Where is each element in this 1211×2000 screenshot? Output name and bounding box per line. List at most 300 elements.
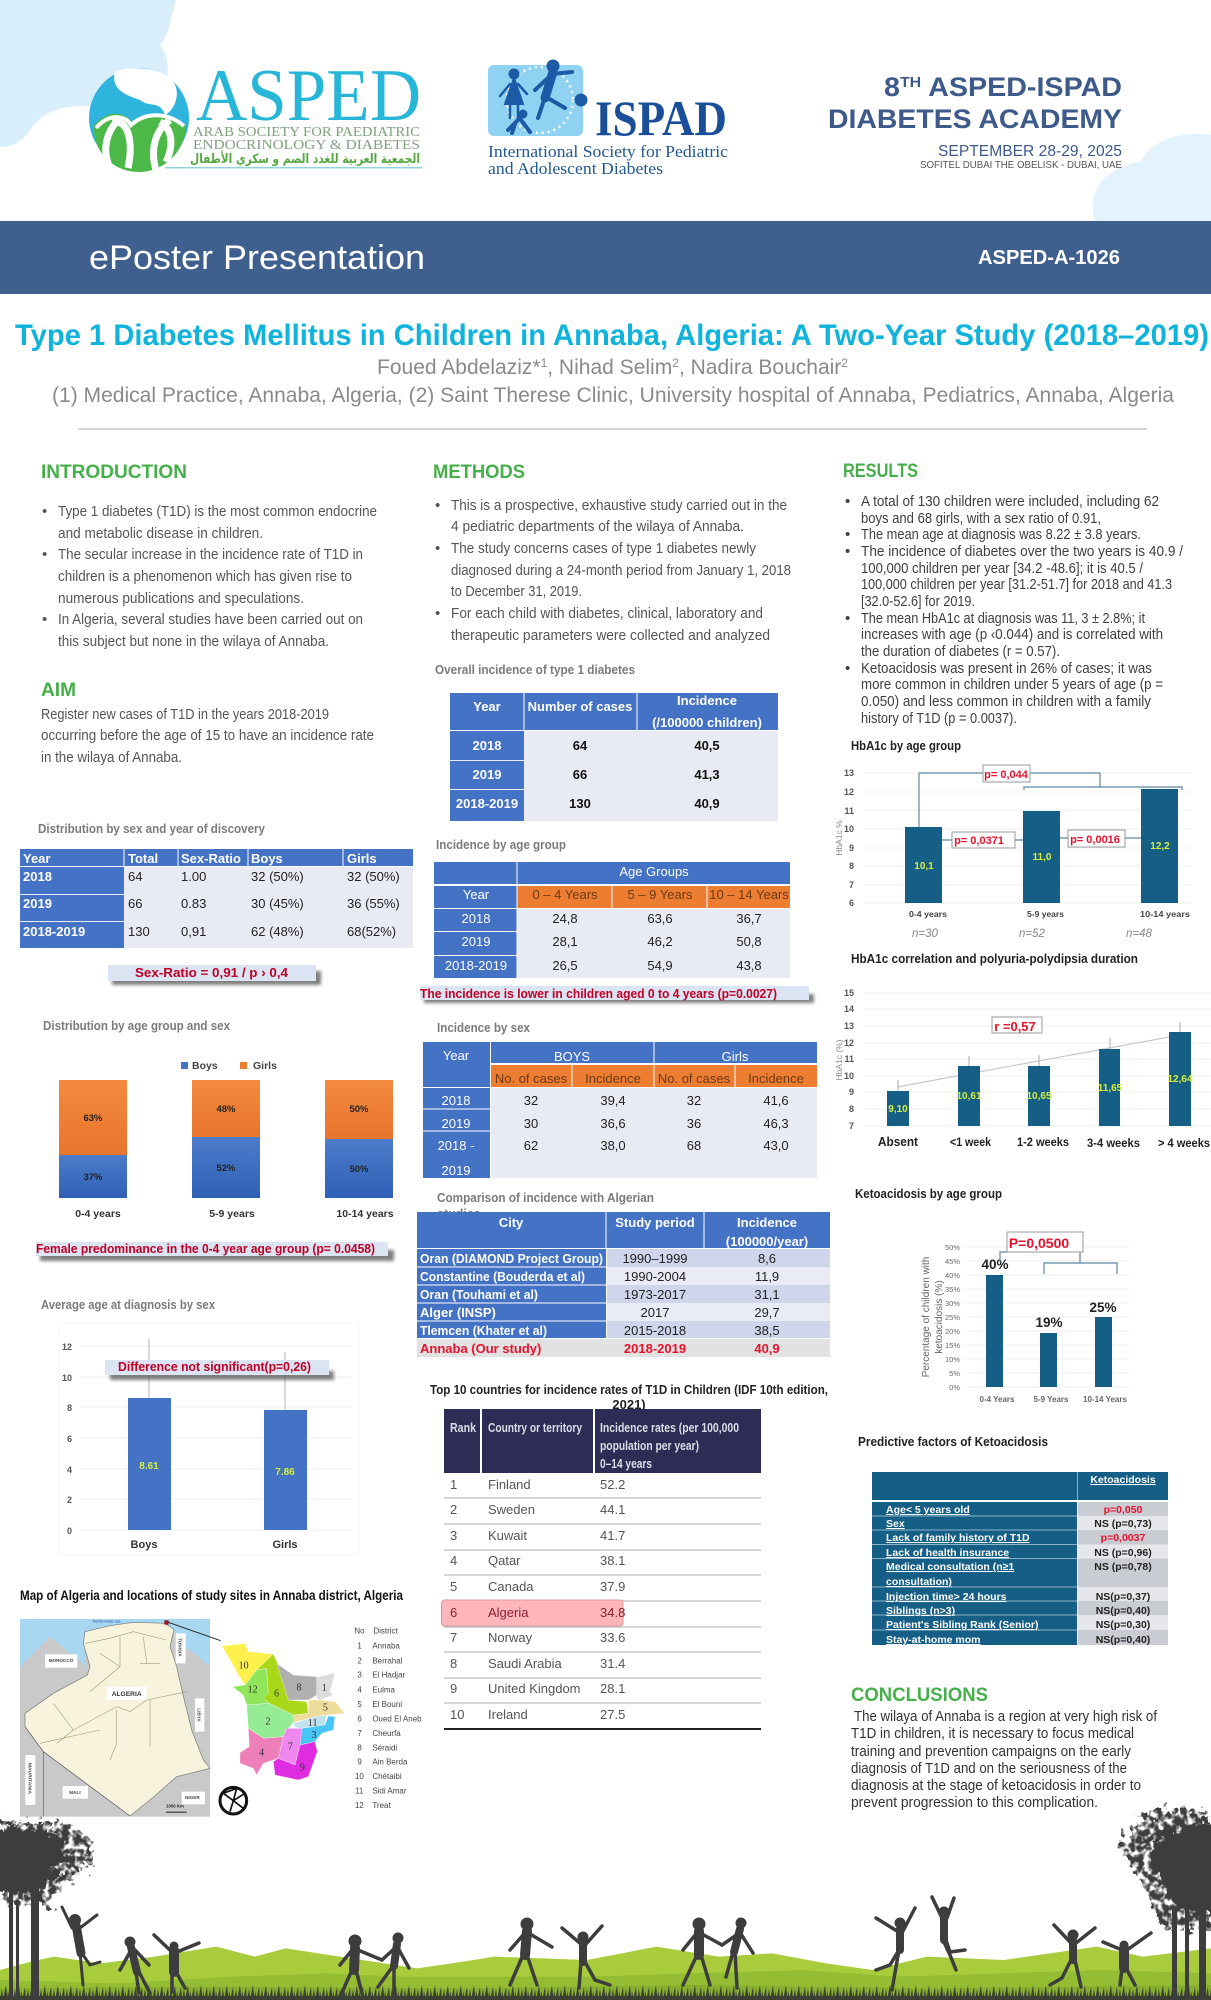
logo subtitle: and Adolescent Diabetes (488, 159, 663, 178)
table: comparison with Algerian studies: Annaba (Our study) (420, 1341, 541, 1356)
logo subtitle: International Society for Pediatric (488, 142, 728, 161)
table: incidence by age group: 63,6 (647, 911, 673, 926)
main title: Type 1 Diabetes Mellitus in Children in Annaba, Algeria: A Two-Year Study (2018–2019) (15, 319, 1209, 352)
significance brackets (919, 773, 1182, 840)
table: incidence by sex: 2018 (442, 1093, 470, 1108)
map legend: districts: 6 (357, 1714, 362, 1723)
x axis labels: 1-2 weeks (1017, 1137, 1069, 1149)
results bullets: A total of 130 children were included, including 62 (861, 493, 1159, 510)
map legend: districts: Chétaibi (372, 1772, 402, 1781)
chart: HbA1c by polyuria duration: 11 (844, 1054, 854, 1064)
bar: 0-4 years: 63% (83, 1113, 103, 1124)
bar: 0-4 years: 37% (83, 1172, 103, 1183)
chart: ketoacidosis by age group (921, 1232, 1130, 1404)
chart: ketoacidosis by age group: 40% (945, 1271, 960, 1280)
aim text: in the wilaya of Annaba. (41, 749, 182, 766)
table: predictive factors: NS(p=0,30) (1096, 1619, 1150, 1631)
table: sex and year: 66 (128, 896, 142, 911)
panel: results (843, 461, 1184, 727)
conclusions text: diagnosis of T1D and on the seriousness of the (851, 1760, 1127, 1777)
table: comparison with Algerian studies: Oran (Touhami et al) (420, 1287, 538, 1302)
p value box (1007, 1232, 1083, 1252)
panel: methods (433, 462, 791, 644)
results bullets: • (845, 543, 850, 560)
map legend: districts: Ain Berda (372, 1758, 408, 1767)
heading: results: RESULTS (843, 461, 918, 482)
tree: left (0, 1822, 92, 2000)
table: top 10 countries: Rank (450, 1421, 476, 1435)
map legend: districts: Eulma (372, 1685, 396, 1694)
child 2 (120, 1937, 150, 1993)
bar: girls: Girls (272, 1539, 298, 1551)
bar: 5-9 years: 52% (216, 1163, 236, 1174)
table: sex and year: 36 (55%) (347, 896, 400, 911)
x axis labels (878, 1135, 1210, 1150)
methods bullets: • (435, 605, 440, 622)
chart: ketoacidosis by age group: 0-4 Years (980, 1395, 1015, 1404)
table: overall incidence: 41,3 (694, 767, 720, 782)
table: predictive factors: p=0,0037 (1101, 1532, 1145, 1544)
callout: sex ratio: Sex-Ratio = 0,91 / p › 0,4 (135, 965, 289, 980)
introduction bullets: • (42, 503, 47, 520)
heading: conclusions: CONCLUSIONS (851, 1685, 988, 1706)
aim text (41, 706, 374, 766)
table: incidence by age group: 26,5 (552, 958, 578, 973)
table: incidence by sex: 2019 (442, 1116, 470, 1131)
table: incidence by sex: No. of cases (495, 1071, 568, 1086)
table: comparison with Algerian studies: 2018-2019 (624, 1341, 686, 1356)
table: incidence by sex: BOYS (554, 1049, 590, 1064)
child 9 (722, 1918, 753, 1988)
map legend: districts: 2 (357, 1656, 362, 1665)
table: incidence by age group: 46,2 (647, 934, 673, 949)
conference title: 8 (884, 72, 899, 102)
bar: girls: 7.86 (275, 1467, 295, 1478)
chart: HbA1c by polyuria duration: 7 (849, 1121, 854, 1131)
bar: 10-14 years: 50% (349, 1104, 369, 1115)
table: sex and year: 130 (128, 924, 150, 939)
p value boxes: p= 0,0016 (1070, 834, 1120, 846)
table: incidence by sex: 30 (524, 1116, 538, 1131)
chart: ketoacidosis by age group: 35% (945, 1285, 960, 1294)
x axis labels: > 4 weeks (1158, 1138, 1210, 1150)
introduction bullets: this subject but none in the wilaya of Annaba. (58, 633, 329, 650)
table: top 10 countries: 41.7 (600, 1528, 625, 1543)
child 11 (932, 1897, 965, 1970)
table: sex and year: Boys (251, 851, 283, 866)
table: top 10 countries (442, 1409, 761, 1730)
table: overall incidence: 40,9 (694, 796, 720, 811)
aim text: Register new cases of T1D in the years 2018-2019 (41, 706, 329, 723)
table: incidence by sex: Incidence (585, 1071, 641, 1086)
table: incidence by sex: 38,0 (600, 1138, 626, 1153)
chart: HbA1c by age group (834, 765, 1192, 940)
chart: ketoacidosis by age group: 50% (945, 1243, 960, 1252)
table: incidence by sex: 39,4 (600, 1093, 626, 1108)
bar: boys: Boys (131, 1539, 157, 1551)
methods bullets: therapeutic parameters were collected and analyzed (451, 627, 770, 644)
p value box: P=0,0500 (1009, 1235, 1069, 1251)
table: overall incidence: Incidence (677, 693, 737, 708)
methods bullets: The study concerns cases of type 1 diabetes newly (451, 540, 756, 557)
arrow: Annaba location (168, 1622, 221, 1641)
heading: top 10 countries (430, 1382, 828, 1412)
table: top 10 countries: 0–14 years (600, 1457, 652, 1471)
callout: lower incidence: The incidence is lower in children aged 0 to 4 years (p=0.0027) (420, 986, 777, 1001)
chart: ketoacidosis by age group: 5-9 Years (1034, 1395, 1069, 1404)
bar: 0-4 years (59, 1080, 127, 1220)
callout: sex ratio (108, 965, 321, 985)
chart: HbA1c by polyuria duration: 10 (844, 1071, 854, 1081)
methods bullets (435, 497, 791, 644)
methods bullets: • (435, 497, 440, 514)
table: comparison with Algerian studies: 1990–1999 (622, 1251, 688, 1266)
map legend: districts (354, 1627, 422, 1810)
table: predictive factors: Ketoacidosis (1090, 1474, 1156, 1486)
conclusions text (851, 1708, 1158, 1811)
table: comparison with Algerian studies: Oran (DIAMOND Project Group) (420, 1251, 603, 1266)
map: Algeria: MAURITANIA (26, 1763, 32, 1794)
ePoster banner: ePoster Presentation (89, 239, 425, 277)
map legend: districts: 10 (355, 1772, 364, 1781)
x axis labels: 0-4 years (909, 909, 947, 919)
table: predictive factors: NS (p=0,73) (1094, 1518, 1152, 1530)
table: comparison with Algerian studies: 29,7 (754, 1305, 780, 1320)
table: incidence by sex: 68 (687, 1138, 701, 1153)
p value boxes: p= 0,044 (984, 769, 1029, 781)
table: incidence by age group: 2018 (462, 911, 490, 926)
chart: ketoacidosis by age group: 15% (945, 1341, 960, 1350)
footer landscape: green hills and grass (0, 1947, 1211, 2000)
map: Annaba districts: 12 (248, 1685, 258, 1696)
map: Algeria: TUNISIA (177, 1638, 182, 1657)
heading: predictive factors: Predictive factors of Ketoacidosis (858, 1434, 1048, 1449)
map legend: districts: 4 (357, 1685, 362, 1694)
table: incidence by age group: 36,7 (736, 911, 762, 926)
table: top 10 countries: population per year) (600, 1439, 699, 1453)
conclusions text: T1D in children, it is necessary to focus medical (851, 1725, 1134, 1742)
map legend: districts: 3 (357, 1671, 362, 1680)
table: top 10 countries: 7 (450, 1630, 457, 1645)
table: top 10 countries: Ireland (488, 1707, 528, 1722)
table: top 10 countries: 10 (450, 1707, 464, 1722)
table: incidence by age group: Year (463, 887, 490, 902)
table: top 10 countries: Country or territory (488, 1421, 582, 1435)
chart: ketoacidosis by age group: 10-14 Years (1083, 1395, 1127, 1404)
table: top 10 countries: Finland (488, 1477, 531, 1492)
bar: boys (128, 1398, 171, 1551)
introduction bullets: Type 1 diabetes (T1D) is the most common endocrine (58, 503, 377, 520)
table: predictive factors: NS(p=0,37) (1096, 1591, 1150, 1603)
heading: methods: METHODS (433, 462, 525, 483)
conclusions text: The wilaya of Annaba is a region at very high risk of (854, 1708, 1158, 1725)
authors: , Nihad Selim (547, 356, 672, 379)
authors: 1 (541, 356, 548, 370)
conclusions text: training and prevention campaigns on the early (851, 1743, 1131, 1760)
map legend: districts: 9 (357, 1758, 362, 1767)
bar: 5-9 years (192, 1080, 260, 1220)
table: incidence by age group (434, 862, 790, 978)
table: top 10 countries: 5 (450, 1579, 457, 1594)
table: sex and year: 2018-2019 (23, 924, 85, 939)
table: comparison with Algerian studies: City (499, 1215, 524, 1230)
table: overall incidence: 2018-2019 (456, 796, 518, 811)
chart: average age at diagnosis by sex: 10 (62, 1373, 72, 1383)
callout: female predominance: Female predominance in the 0-4 year age group (p= 0.0458) (36, 1241, 375, 1256)
authors: , Nadira Bouchair (679, 356, 841, 379)
results bullets: • (845, 493, 850, 510)
table: top 10 countries: Norway (488, 1630, 533, 1645)
heading: incidence by sex: Incidence by sex (437, 1021, 530, 1035)
chart: average age at diagnosis by sex: 0 (67, 1526, 72, 1536)
table: incidence by sex: 2018 - (438, 1138, 474, 1153)
heading: HbA1c correlation: HbA1c correlation and polyuria-polydipsia duration (851, 951, 1138, 966)
map: Algeria: MOROCCO (49, 1658, 74, 1663)
map legend: districts: Oued El Aneb (372, 1714, 422, 1723)
results bullets: increases with age (p ‹0.044) and is correlated with (861, 626, 1163, 643)
table: predictive factors: NS (p=0,78) (1094, 1561, 1152, 1573)
heading: introduction: INTRODUCTION (41, 462, 187, 483)
table: comparison with Algerian studies: Constantine (Bouderda et al) (420, 1269, 585, 1284)
chart: average age at diagnosis by sex (59, 1323, 359, 1555)
results bullets: boys and 68 girls, with a sex ratio of 0.91, (861, 510, 1101, 527)
table: predictive factors: Lack of health insurance (886, 1547, 1009, 1559)
table: overall incidence: 40,5 (694, 738, 720, 753)
x axis labels: <1 week (950, 1137, 992, 1149)
table: sex and year: 64 (128, 869, 142, 884)
ePoster banner (0, 221, 1211, 294)
table: overall incidence (450, 693, 778, 821)
map legend: districts: El Hadjar (372, 1671, 406, 1680)
map: Algeria: ALGERIA (112, 1691, 142, 1698)
introduction bullets: • (42, 611, 47, 628)
results bullets: more common in children under 5 years of age (p = (861, 676, 1163, 693)
header background clouds (0, 0, 1211, 221)
table: incidence by age group: Age Groups (619, 864, 689, 879)
heading: comparison of incidence: studies (437, 1207, 481, 1221)
chart: HbA1c by polyuria duration (834, 988, 1211, 1150)
table: sex and year: Sex-Ratio (181, 851, 241, 866)
chart: HbA1c by polyuria duration: 10,61 (956, 1091, 982, 1102)
results bullets: history of T1D (p = 0.0037). (861, 710, 1017, 727)
table: incidence by age group: 2019 (462, 934, 490, 949)
table: overall incidence: Year (473, 699, 501, 714)
chart legend (181, 1060, 277, 1072)
methods bullets: to December 31, 2019. (451, 583, 582, 600)
chart: HbA1c by polyuria duration: 9 (849, 1087, 854, 1097)
chart: average age at diagnosis by sex: 12 (62, 1342, 72, 1352)
map legend: districts: Cheurfa (372, 1729, 401, 1738)
child 8 (683, 1918, 722, 1985)
table: predictive factors: Medical consultation (n≥1 (886, 1561, 1014, 1573)
results bullets: • (845, 610, 850, 627)
map: Annaba districts: 11 (308, 1718, 317, 1729)
table: incidence by age group: 50,8 (736, 934, 762, 949)
child 13 (1103, 1933, 1151, 1985)
bar: 10-14 years (325, 1080, 394, 1220)
table: top 10 countries: 8 (450, 1656, 457, 1671)
table: top 10 countries: Algeria (488, 1605, 529, 1620)
bar: 5-9 years: 48% (216, 1104, 236, 1115)
map legend: districts: 8 (357, 1743, 362, 1752)
table: comparison with Algerian studies (417, 1212, 830, 1357)
panel: conclusions (851, 1685, 1158, 1811)
table: top 10 countries: 37.9 (600, 1579, 625, 1594)
logo subtitle (488, 142, 728, 178)
x axis labels: 3-4 weeks (1087, 1138, 1140, 1150)
chart: HbA1c by age group: 11,0 (1033, 852, 1052, 863)
chart: ketoacidosis by age group: ketoacidosis (%) (934, 1280, 945, 1354)
map: Annaba districts: 4 (259, 1747, 264, 1758)
table: top 10 countries: Saudi Arabia (488, 1656, 562, 1671)
table: overall incidence: Number of cases (528, 699, 632, 714)
table: predictive factors: NS(p=0,40) (1096, 1605, 1150, 1617)
heading: incidence by age group: Incidence by age group (436, 838, 566, 852)
x axis labels: 5-9 years (1027, 909, 1064, 919)
map legend: districts: Berrahal (372, 1656, 403, 1665)
authors: Foued Abdelaziz* (377, 356, 540, 379)
introduction bullets (42, 503, 377, 650)
highlight: Algeria row (442, 1600, 623, 1626)
heading: overall incidence: Overall incidence of type 1 diabetes (435, 663, 635, 677)
table: top 10 countries: 2 (450, 1502, 457, 1517)
p value boxes (952, 765, 1125, 848)
chart: average age at diagnosis by sex: 2 (67, 1495, 72, 1505)
results bullets (845, 493, 1184, 727)
results bullets: 100,000 children per year [34.2 -48.6]; it is 40.5 / (861, 560, 1144, 577)
table: top 10 countries: 38.1 (600, 1553, 625, 1568)
x axis labels: Absent (878, 1135, 919, 1149)
map: Algeria: 1000 Km (166, 1804, 184, 1809)
table: comparison with Algerian studies: 2017 (641, 1305, 669, 1320)
map: Algeria: Mediterranean sea (93, 1620, 121, 1624)
table: incidence by sex: Incidence (748, 1071, 804, 1086)
callout: not significant: Difference not significant(p=0,26) (118, 1359, 311, 1374)
table: top 10 countries: 27.5 (600, 1707, 625, 1722)
chart: HbA1c by polyuria duration: 12 (844, 1038, 854, 1048)
chart: ketoacidosis by age group: 19% (1035, 1315, 1063, 1330)
map legend: districts: No (354, 1627, 365, 1636)
sample sizes (912, 928, 1153, 940)
chart: ketoacidosis by age group: 40% (981, 1257, 1009, 1272)
table: comparison with Algerian studies: Incidence (737, 1215, 797, 1230)
sample sizes: n=30 (912, 928, 939, 940)
map: Annaba districts (222, 1643, 345, 1780)
conference title (828, 72, 1122, 171)
map of Algeria and Annaba district (20, 1619, 422, 1817)
chart: HbA1c by age group: 11 (844, 806, 854, 816)
map legend: districts: El Bouni (372, 1700, 402, 1709)
chart: ketoacidosis by age group: 25% (1089, 1300, 1117, 1315)
chart: ketoacidosis by age group: 0% (949, 1383, 960, 1392)
conference title: ASPED-ISPAD (921, 72, 1122, 102)
table: sex and year: 32 (50%) (347, 869, 400, 884)
chart: HbA1c by age group: 7 (849, 880, 854, 890)
table: incidence by age group: 5 – 9 Years (627, 887, 693, 902)
results bullets: • (845, 660, 850, 677)
table: top 10 countries: 33.6 (600, 1630, 625, 1645)
chart: HbA1c by polyuria duration: 15 (844, 988, 854, 998)
table: predictive factors: Lack of family history of T1D (886, 1532, 1030, 1544)
chart: ketoacidosis by age group: 10% (945, 1355, 960, 1364)
table: top 10 countries: 9 (450, 1681, 457, 1696)
table: incidence by age group: 2018-2019 (445, 958, 507, 973)
table: incidence by sex: Year (443, 1048, 470, 1063)
icon: globe with children (89, 68, 189, 172)
table: top 10 countries: 4 (450, 1553, 457, 1568)
table: comparison with Algerian studies: (100000/year) (726, 1234, 808, 1249)
bar: boys: 8.61 (139, 1461, 159, 1472)
map: Algeria: LIBYA (196, 1708, 201, 1722)
map legend: districts: 5 (357, 1700, 362, 1709)
chart: HbA1c by age group: 10 (844, 824, 854, 834)
icon: compass (220, 1787, 247, 1814)
chart: HbA1c by age group: 13 (844, 768, 854, 778)
heading: comparison of incidence (437, 1191, 654, 1221)
table: incidence by sex (423, 1042, 817, 1178)
table: predictive factors: consultation) (886, 1576, 952, 1588)
chart: HbA1c by age group: 6 (849, 898, 854, 908)
chart: HbA1c by polyuria duration: 14 (844, 1004, 854, 1014)
chart: HbA1c by polyuria duration: 8 (849, 1104, 854, 1114)
heading: top 10 countries: 2021) (612, 1397, 646, 1412)
map legend: districts: 12 (355, 1801, 364, 1810)
bar: girls (264, 1410, 307, 1551)
heading: HbA1c by age: HbA1c by age group (851, 738, 961, 753)
table: top 10 countries: 31.4 (600, 1656, 625, 1671)
table: top 10 countries: Kuwait (488, 1528, 527, 1543)
chart: HbA1c by polyuria duration: HbA1c (%) (834, 1039, 844, 1081)
chart: ketoacidosis by age group: 30% (945, 1299, 960, 1308)
p value boxes: p= 0,0371 (954, 835, 1004, 847)
table: incidence by sex: 36,6 (600, 1116, 626, 1131)
map: Annaba districts: 3 (311, 1730, 316, 1741)
chart: ketoacidosis by age group: 5% (949, 1369, 960, 1378)
table: comparison with Algerian studies: 2015-2018 (624, 1323, 686, 1338)
map legend: districts: 7 (357, 1729, 362, 1738)
heading: distribution by age and sex: Distribution by age group and sex (43, 1019, 230, 1033)
conference title: SOFITEL DUBAI THE OBELISK - DUBAI, UAE (920, 159, 1122, 171)
icon: children playing (488, 60, 587, 136)
table: predictive factors: Age< 5 years old (886, 1504, 970, 1516)
map: Annaba districts: 5 (323, 1703, 328, 1714)
map: Annaba districts: 10 (239, 1660, 249, 1671)
table: sex and year: Total (128, 851, 158, 866)
introduction bullets: The secular increase in the incidence rate of T1D in (58, 546, 363, 563)
table: sex and year: 68(52%) (347, 924, 396, 939)
bar: 0-4 years: 0-4 years (75, 1208, 121, 1220)
table: top 10 countries: Incidence rates (per 100,000 (600, 1421, 739, 1435)
table: incidence by sex: 2019 (442, 1163, 470, 1178)
table: sex and year: 0,91 (181, 924, 206, 939)
results bullets: [32.0-52.6] for 2019. (861, 593, 975, 610)
x axis labels (909, 909, 1190, 919)
table: top 10 countries: Qatar (488, 1553, 521, 1568)
logo subtitle: ARAB SOCIETY FOR PAEDIATRIC (193, 125, 420, 140)
child 4 (340, 1935, 382, 1997)
table: top 10 countries: 44.1 (600, 1502, 625, 1517)
child 6 (510, 1918, 552, 1985)
table: sex and year: 1.00 (181, 869, 206, 884)
table: sex and year (20, 849, 413, 948)
table: overall incidence: (/100000 children) (652, 715, 762, 730)
table: top 10 countries: Sweden (488, 1502, 535, 1517)
child 12 (1050, 1925, 1095, 1987)
bar: 10-14 years: 10-14 years (336, 1208, 394, 1220)
chart: HbA1c by age group: 12 (844, 787, 854, 797)
conference title: TH (900, 74, 921, 91)
map legend: districts: 1 (357, 1642, 362, 1651)
